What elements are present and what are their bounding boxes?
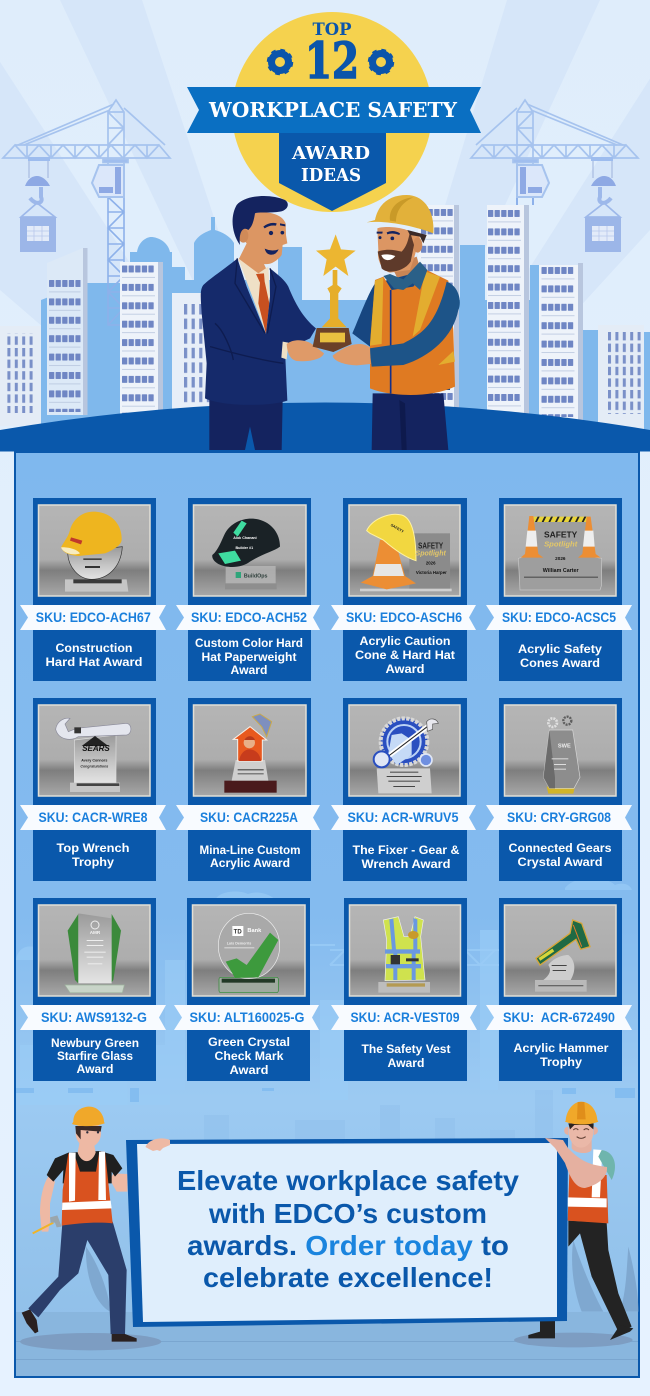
award name: Trophy: [72, 857, 115, 869]
ear: [238, 229, 248, 243]
card 3: [331, 498, 476, 681]
title badge: [187, 12, 481, 212]
sku ribbon: [486, 805, 632, 830]
award name: Acrylic Hammer: [514, 1043, 609, 1055]
award name: [200, 845, 300, 870]
building: left tower: [47, 248, 88, 415]
product: fixer gear and wrench: [374, 718, 438, 793]
star: [316, 234, 356, 276]
city skyline silhouette: [41, 217, 650, 430]
crane: right: [471, 100, 638, 325]
head: [569, 1116, 593, 1148]
award name: Green Crystal: [208, 1037, 290, 1049]
call to action: [177, 1165, 519, 1293]
award name: Check Mark: [214, 1051, 284, 1063]
vest: [370, 270, 455, 395]
right worker arm over sign: [545, 1138, 607, 1188]
card 12: [486, 898, 632, 1081]
product: newbury green starfire: AMR: [90, 930, 101, 935]
left arm: [40, 1177, 55, 1232]
product: black hard hat paperweight: BuildOps: [244, 573, 268, 579]
card 8: [486, 698, 632, 881]
tie: [256, 273, 269, 334]
award ideas label: IDEAS: [301, 165, 361, 186]
head: [377, 227, 420, 273]
award name: Acrylic Safety: [518, 644, 603, 656]
hair: [75, 1126, 102, 1139]
neck: [78, 1140, 96, 1161]
sku: SKU: ACR-672490: [503, 1010, 615, 1025]
award name: [195, 638, 303, 677]
product: newbury green starfire: [65, 913, 124, 993]
product: hard hat award: [61, 512, 128, 592]
ribbon banner: [187, 87, 481, 133]
smile: [381, 254, 395, 260]
collar: [383, 262, 427, 290]
t-shirt: [47, 1151, 122, 1183]
sign face: [137, 1143, 557, 1322]
call to action: celebrate excellence!: [203, 1262, 493, 1293]
hard hat: [367, 195, 433, 233]
building: behind worker: [418, 205, 459, 410]
product: caution cone and hard hat: SAFETY: [390, 523, 405, 534]
award name: [208, 1037, 290, 1077]
sleeve: [598, 1150, 615, 1180]
card 10: [174, 898, 319, 1081]
award name: Construction: [56, 643, 132, 655]
vest stripes: [370, 271, 455, 365]
award name: [56, 843, 130, 869]
name plate: [320, 333, 345, 342]
beard: [378, 232, 414, 272]
sku ribbon: [20, 1005, 166, 1030]
safety worker: [333, 195, 460, 450]
hair: [233, 196, 288, 245]
card 1: [20, 498, 166, 681]
product: green crystal check mark: [218, 913, 280, 993]
sku: SKU: ACR-WRUV5: [348, 810, 459, 825]
boot: [610, 1325, 633, 1340]
award name: [514, 1043, 609, 1069]
vest stripes: [62, 1152, 112, 1210]
top label: TOP: [312, 20, 352, 39]
face: [76, 1119, 101, 1147]
ground shadow: [514, 1333, 633, 1347]
sku ribbon: [174, 1005, 319, 1030]
trousers: [209, 400, 283, 450]
right worker: [514, 1102, 638, 1347]
safety vest: [62, 1152, 113, 1226]
award name: Connected Gears: [508, 843, 612, 855]
sku ribbon: [486, 1005, 632, 1030]
sku ribbon: [20, 605, 166, 630]
product: green crystal check mark: Bank: [247, 928, 262, 934]
trousers: [28, 1222, 127, 1334]
award name: Starfire Glass: [57, 1051, 133, 1063]
card 11: [331, 898, 477, 1081]
award name: Hat Paperweight: [202, 652, 297, 664]
card 4: [486, 498, 632, 681]
eyes: [86, 1131, 99, 1133]
product: caution cone and hard hat: Spotlight: [416, 551, 446, 558]
award name: Acrylic Caution: [360, 636, 450, 648]
hard hat: [72, 1107, 105, 1126]
award name: Wrench Award: [362, 859, 450, 871]
award name: Award: [386, 664, 424, 676]
suit jacket: [201, 258, 316, 405]
award name: [508, 843, 612, 869]
product: caution cone and hard hat: 2026: [426, 560, 436, 565]
hair: [568, 1123, 594, 1129]
content panel: [15, 452, 639, 1377]
hard hat: [565, 1102, 598, 1125]
award name: Award: [388, 1058, 424, 1070]
product: mina-line house award: [224, 714, 277, 793]
award ideas label: [291, 143, 370, 186]
sleeve: [369, 282, 460, 367]
gold column: [322, 270, 347, 327]
product: safety cones: SAFETY: [544, 530, 578, 540]
shield: [279, 133, 386, 211]
sku ribbon: [331, 1005, 477, 1030]
award name: Cone & Hard Hat: [355, 650, 455, 662]
sku: SKU: EDCO-ACSC5: [502, 610, 616, 625]
vest: [568, 1173, 608, 1223]
left worker hand on sign: [146, 1138, 170, 1151]
award name: Custom Color Hard: [195, 638, 303, 650]
award name: Trophy: [540, 1057, 583, 1069]
number 12: 12: [305, 31, 359, 90]
sku ribbon: [176, 805, 320, 830]
hair: [407, 230, 427, 243]
card 9: [20, 898, 166, 1081]
award name: Award: [230, 1065, 268, 1077]
building: far left: [0, 326, 41, 426]
award name: The Safety Vest: [362, 1044, 451, 1056]
background leaves: [572, 1240, 638, 1312]
crane: left: [3, 100, 170, 325]
shirt torso: [352, 270, 453, 390]
sku ribbon: [20, 805, 166, 830]
shirt: [238, 258, 270, 333]
award name: Cones Award: [520, 658, 600, 670]
award name: Top Wrench: [56, 843, 130, 855]
sign board: [126, 1138, 568, 1327]
product: black hard hat paperweight: Builder #1: [235, 546, 253, 550]
product: safety cones: William Carter: [543, 568, 579, 574]
product: wrench trophy: SEARS: [82, 744, 110, 753]
floor: [16, 1312, 638, 1376]
trousers: [372, 393, 448, 450]
businessman: [201, 196, 324, 450]
sku: SKU: EDCO-ACH67: [36, 610, 151, 625]
sku: SKU: EDCO-ASCH6: [346, 610, 462, 625]
product: safety cones: Spotlight: [544, 540, 578, 549]
sku: SKU: EDCO-ACH52: [191, 610, 307, 625]
facial features: [263, 223, 285, 255]
building: right tower: [487, 205, 529, 420]
ear: [413, 237, 422, 253]
product: green crystal check mark: Luis Demorris: [227, 942, 251, 946]
eyes and brows: [377, 231, 400, 240]
background rays: [0, 0, 650, 577]
sku: SKU: CRY-GRG08: [507, 810, 611, 825]
banner heading: WORKPLACE SAFETY: [208, 98, 457, 122]
award name: [51, 1038, 139, 1076]
product: wrench trophy: Congratulations: [80, 765, 108, 769]
card 7: [331, 698, 476, 881]
trousers: [528, 1221, 632, 1338]
award name: Acrylic Award: [210, 858, 290, 870]
sku ribbon: [486, 605, 632, 630]
award name: Mina-Line Custom: [200, 845, 300, 857]
icon: left gear: [268, 50, 292, 74]
product: caution cone and hard hat: [360, 514, 452, 591]
head and neck: [238, 212, 287, 287]
building: centre left 1: [120, 262, 163, 417]
product: wrench trophy: [56, 718, 131, 792]
award name: Award: [76, 1064, 114, 1076]
neck and face: [572, 1140, 592, 1153]
award name: Newbury Green: [51, 1038, 139, 1050]
award name: [362, 1044, 451, 1070]
product: black hard hat paperweight: [212, 519, 280, 589]
product: safety vest: [378, 917, 430, 993]
award name: [518, 644, 603, 670]
building: right tower 2: [539, 263, 583, 425]
cuff: [281, 342, 288, 359]
sku: SKU: ACR-VEST09: [350, 1010, 460, 1025]
award name: [352, 845, 460, 871]
vest stripes: [568, 1149, 607, 1207]
sku ribbon: [331, 605, 476, 630]
product: caution cone and hard hat: SAFETY: [418, 540, 443, 550]
card 5: [20, 698, 166, 881]
call to action: awards. Order today to: [187, 1230, 509, 1261]
left worker: [20, 1107, 161, 1350]
ground shadow: [20, 1333, 161, 1350]
trophy: [313, 234, 356, 352]
sku ribbon: [176, 605, 320, 630]
neck: [392, 257, 422, 290]
product: acrylic hammer: [535, 920, 590, 992]
hand: [333, 344, 371, 365]
hand: [287, 340, 324, 361]
award name: Hard Hat Award: [46, 657, 142, 669]
yellow circle: [232, 12, 432, 212]
call to action: with EDCO’s custom: [208, 1198, 487, 1229]
card 2: [176, 498, 320, 681]
product: caution cone and hard hat: Victoria Harper: [416, 570, 447, 575]
award name: [355, 636, 455, 676]
card 6: [176, 698, 320, 881]
icon: right gear: [370, 50, 392, 74]
right arm: [110, 1173, 127, 1192]
award ideas label: AWARD: [291, 143, 370, 164]
hammer: [33, 1223, 53, 1233]
building: far right: [598, 325, 645, 435]
product: safety cones: [518, 516, 602, 590]
sku ribbon: [331, 805, 476, 830]
sku: SKU: ALT160025-G: [190, 1010, 304, 1025]
product: connected gears crystal: SWE: [558, 743, 571, 749]
building: centre left 2: [172, 293, 216, 413]
ears: [564, 1127, 598, 1135]
sku: SKU: CACR225A: [200, 810, 298, 825]
sku: SKU: AWS9132-G: [41, 1010, 147, 1025]
product: safety cones: 2026: [555, 556, 566, 561]
product: connected gears crystal: [543, 717, 580, 794]
award name: Award: [230, 665, 268, 677]
faint city in panel: [16, 878, 635, 1150]
sign frame: [126, 1138, 568, 1327]
closed eyes and smile: [573, 1129, 589, 1138]
background leaf: [86, 1247, 110, 1312]
award name: [46, 643, 142, 669]
award name: The Fixer - Gear &: [352, 845, 460, 857]
sku: SKU: CACR-WRE8: [38, 810, 148, 825]
product: green crystal check mark: TD: [234, 929, 242, 935]
award name: Crystal Award: [518, 857, 602, 869]
boots: [22, 1309, 137, 1342]
call to action: Elevate workplace safety: [177, 1165, 519, 1196]
wooden base: [313, 328, 352, 352]
product: wrench trophy: Avery Connors: [81, 759, 107, 763]
product: black hard hat paperweight: Alok Chanani: [233, 536, 257, 540]
hill: [0, 402, 650, 452]
